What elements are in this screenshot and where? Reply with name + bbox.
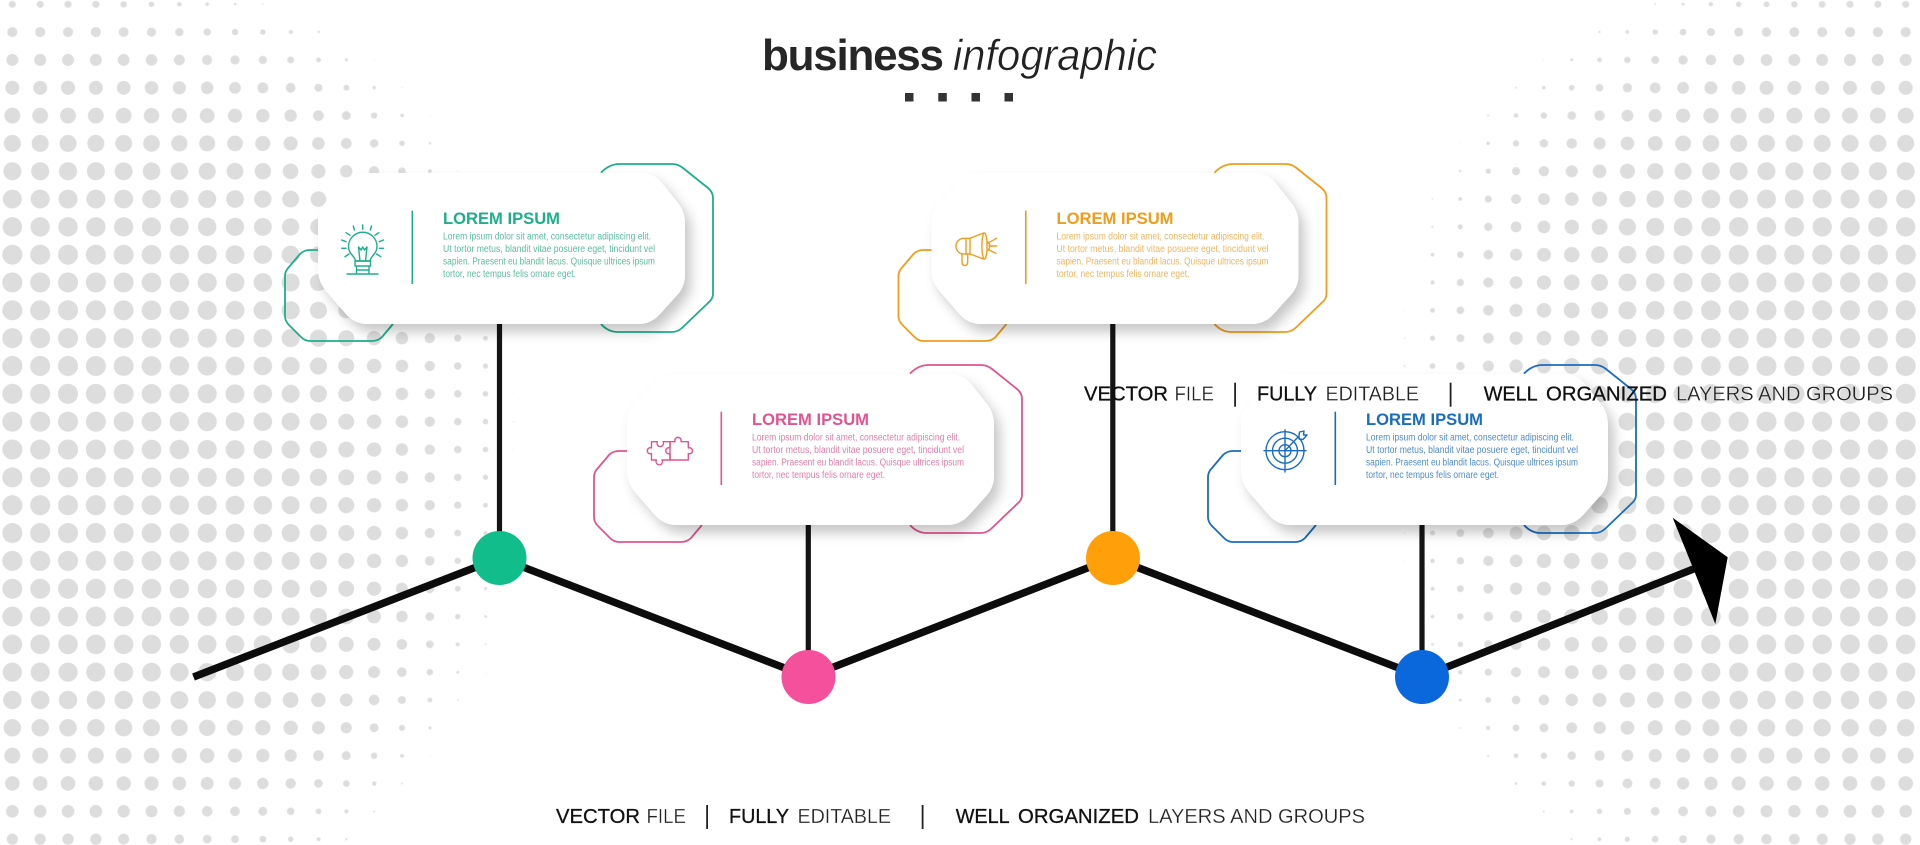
- text block: sapien. Praesent eu blandit lacus. Quisque ultrices ipsum: [1056, 256, 1268, 267]
- divider: [1334, 412, 1336, 485]
- icon: puzzle pieces: [647, 437, 692, 465]
- panel: card 3 orange: [898, 164, 1326, 341]
- text block: Lorem ipsum dolor sit amet, consectetur adipiscing elit.: [1366, 432, 1574, 443]
- text block: Lorem ipsum dolor sit amet, consectetur adipiscing elit.: [752, 432, 960, 443]
- caption: bottom features strip: WELL: [956, 805, 1010, 828]
- caption: floating features strip: EDITABLE: [1326, 383, 1419, 406]
- timeline stems: [500, 320, 1422, 677]
- caption: floating features strip: WELL: [1484, 383, 1538, 406]
- text block: sapien. Praesent eu blandit lacus. Quisque ultrices ipsum: [752, 457, 964, 468]
- text block: [1366, 432, 1578, 481]
- divider: [411, 211, 413, 284]
- caption: bottom features strip: EDITABLE: [798, 805, 891, 828]
- title marker squares: [905, 93, 1013, 102]
- caption: floating features strip: LAYERS AND GROUPS: [1676, 383, 1893, 406]
- icon: light bulb: [342, 225, 384, 274]
- caption: bottom features strip: VECTOR: [556, 805, 640, 828]
- text block: Ut tortor metus, blandit vitae posuere eget, tincidunt vel: [752, 445, 964, 456]
- node: pink: [782, 650, 836, 704]
- caption: bottom features strip: [556, 805, 1365, 829]
- caption: floating features strip: FULLY: [1257, 383, 1317, 406]
- text block: tortor, nec tempus felis ornare eget.: [443, 269, 576, 280]
- divider: [1025, 211, 1027, 284]
- caption: floating features strip: FILE: [1174, 383, 1214, 406]
- caption: bottom features strip: LAYERS AND GROUPS: [1148, 805, 1365, 828]
- icon: megaphone: [956, 233, 997, 266]
- heading: LOREM IPSUM: [1056, 210, 1174, 228]
- panel: card 1 green: [285, 164, 713, 341]
- caption: bottom features strip: ORGANIZED: [1018, 805, 1139, 828]
- title: infographic: [953, 31, 1157, 80]
- caption: bottom features strip: FILE: [646, 805, 686, 828]
- title: [762, 31, 1157, 80]
- text block: sapien. Praesent eu blandit lacus. Quisque ultrices ipsum: [443, 256, 655, 267]
- text block: Ut tortor metus, blandit vitae posuere eget, tincidunt vel: [1056, 244, 1268, 255]
- text block: [443, 231, 655, 280]
- icon: target with arrow: [1264, 430, 1307, 472]
- text block: Lorem ipsum dolor sit amet, consectetur adipiscing elit.: [1056, 231, 1264, 242]
- divider: [720, 412, 722, 485]
- text block: tortor, nec tempus felis ornare eget.: [1056, 269, 1190, 280]
- text block: sapien. Praesent eu blandit lacus. Quisque ultrices ipsum: [1366, 457, 1578, 468]
- heading: LOREM IPSUM: [443, 210, 560, 228]
- text block: [1056, 231, 1268, 280]
- text block: [752, 432, 964, 481]
- text block: Lorem ipsum dolor sit amet, consectetur adipiscing elit.: [443, 231, 651, 242]
- node: orange: [1086, 531, 1140, 585]
- caption: floating features strip: ORGANIZED: [1546, 383, 1667, 406]
- caption: floating features strip: [1084, 383, 1893, 407]
- heading: LOREM IPSUM: [1366, 411, 1483, 429]
- heading: LOREM IPSUM: [752, 411, 869, 429]
- title: business: [762, 31, 944, 80]
- caption: bottom features strip: FULLY: [729, 805, 789, 828]
- panel: card 2 pink: [594, 365, 1022, 542]
- arrow: zigzag timeline: [194, 518, 1728, 677]
- text block: Ut tortor metus, blandit vitae posuere eget, tincidunt vel: [443, 244, 655, 255]
- node: green: [472, 531, 526, 585]
- panel: card 4 blue: [1208, 365, 1636, 542]
- caption: floating features strip: VECTOR: [1084, 383, 1168, 406]
- text block: Ut tortor metus, blandit vitae posuere eget, tincidunt vel: [1366, 445, 1578, 456]
- text block: tortor, nec tempus felis ornare eget.: [1366, 470, 1499, 481]
- node: blue: [1395, 650, 1449, 704]
- text block: tortor, nec tempus felis ornare eget.: [752, 470, 885, 481]
